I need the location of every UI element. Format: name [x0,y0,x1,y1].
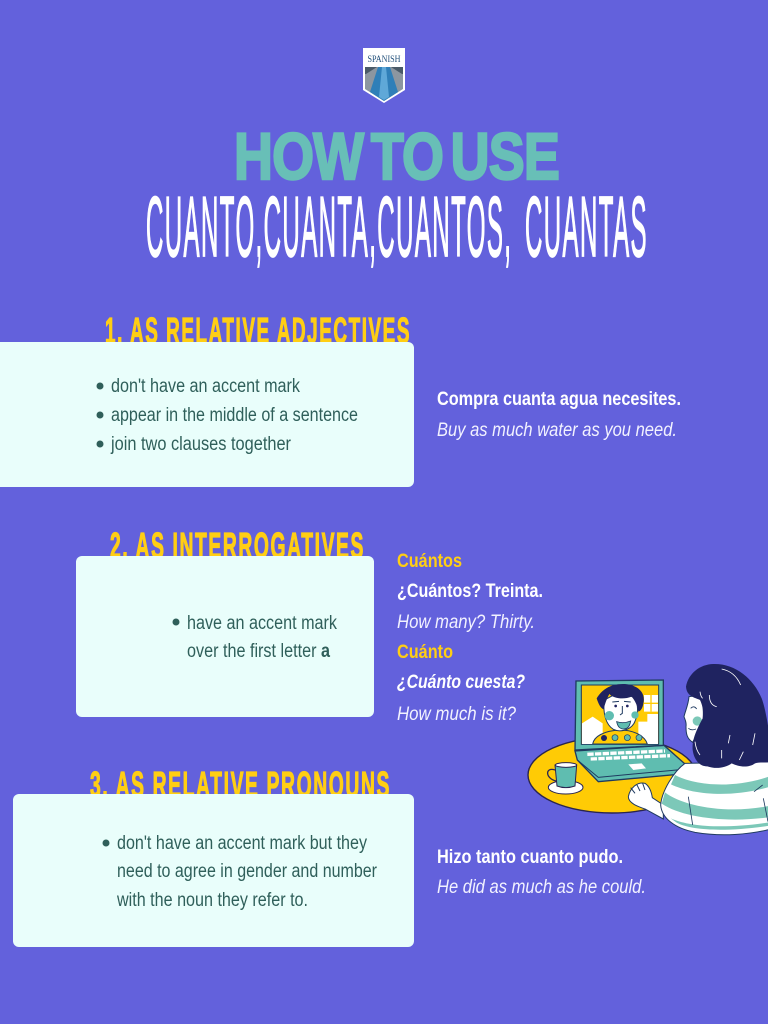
example 2 [397,551,543,725]
woman [628,664,768,835]
example 3 [437,847,646,898]
section 1 heading: 1. AS RELATIVE ADJECTIVES [105,310,411,351]
example 1: Buy as much water as you need. [437,420,677,441]
example 2: How many? Thirty. [397,612,535,633]
man on screen [593,684,647,744]
example 2: Cuántos [397,551,462,572]
bullet text: have an accent mark [187,613,337,634]
title [146,119,648,275]
logo: shield: SPANISH [368,54,401,64]
bullet text: with the noun they refer to. [116,890,308,911]
example 3: Hizo tanto cuanto pudo. [437,847,623,868]
bullet list [96,376,358,455]
bullet text [172,613,337,662]
example 2: ¿Cuánto cuesta? [397,672,525,693]
bullet text: don't have an accent mark but they [117,833,367,854]
sweater [661,762,768,835]
example 2: ¿Cuántos? Treinta. [397,581,543,602]
title line: how to use: HOW TO USE [234,119,559,193]
face [684,695,703,742]
bullet list: appear in the middle of a sentence [111,405,358,426]
panel: relative pronouns [13,794,414,947]
section 3 heading: 3. AS RELATIVE PRONOUNS [90,764,391,805]
bullet text: over the first letter a [187,641,330,662]
coffee cup [548,763,583,794]
example 2: Cuánto [397,642,453,663]
logo: shield [363,48,405,103]
panel: relative adjectives [0,342,414,487]
section 2 heading: 2. AS INTERROGATIVES [110,525,365,566]
table [528,737,696,813]
bullet text [102,833,378,911]
hair [686,664,768,768]
bullet list: join two clauses together [110,434,292,455]
window and buildings on screen [582,695,658,744]
laptop [575,680,685,782]
example 1 [437,389,681,441]
example 2: How much is it? [397,704,516,725]
example 1: Compra cuanta agua necesites. [437,389,681,410]
example 3: He did as much as he could. [437,877,646,898]
bullet list: don't have an accent mark [111,376,300,397]
bullet text: need to agree in gender and number [117,861,378,882]
hand and arm [628,783,663,819]
panel: interrogatives [76,556,374,717]
illustration: video call [528,664,768,835]
